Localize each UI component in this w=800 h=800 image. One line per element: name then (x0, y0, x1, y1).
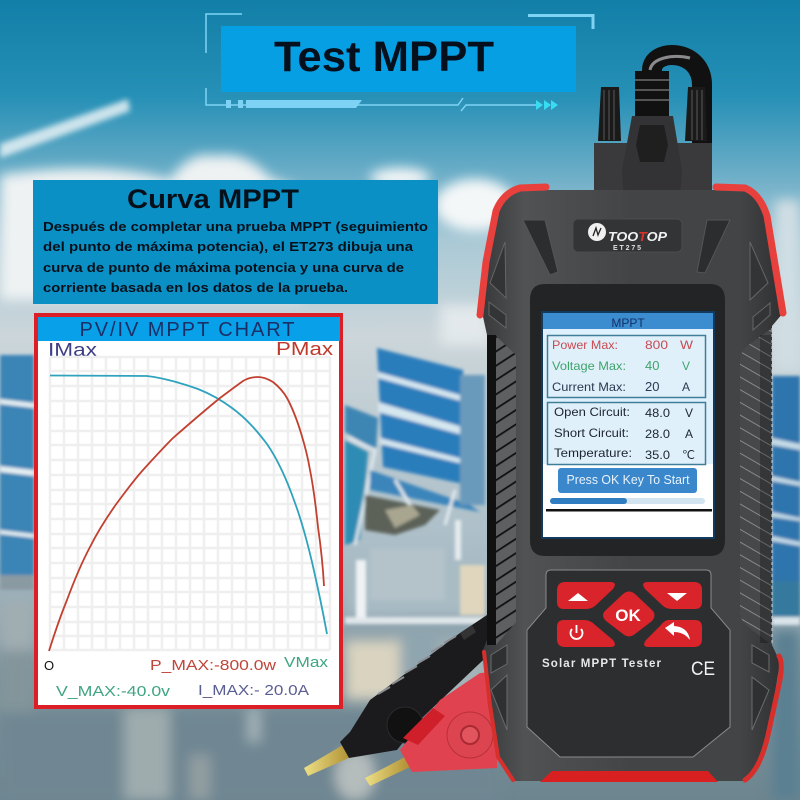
device: brand logo: ET275 (613, 245, 641, 252)
device: screen: 48.0 (645, 406, 670, 420)
title banner: Test MPPT (274, 33, 494, 81)
chart labels (44, 654, 329, 700)
device: screen: Current Max: (552, 380, 626, 394)
device: screen: W (680, 338, 694, 352)
chart labels: P_MAX:-800.0w (150, 657, 276, 674)
panel: Curva MPPT description: curva de punto de máxima potencia y una curva de (43, 260, 404, 275)
button: up (557, 582, 615, 609)
panel: Curva MPPT description: corriente basada en los datos de la prueba. (43, 280, 348, 295)
device: screen: 40 (645, 358, 659, 373)
panel: PV/IV MPPT chart (36, 315, 341, 707)
device: screen: V (682, 359, 690, 373)
device: screen: 20 (645, 379, 659, 394)
device: screen: Voltage Max: (552, 359, 626, 373)
device: side grips (487, 328, 772, 645)
device: screen: Temperature: (554, 446, 632, 460)
device: screen: A (685, 427, 693, 441)
device: screen: Press OK Key To Start (566, 472, 690, 487)
device: screen: 28.0 (645, 427, 670, 441)
test clips: black and red (304, 615, 497, 786)
panel: PV/IV MPPT chart: PMax (276, 339, 333, 359)
panel: PV/IV MPPT chart: IMax (48, 340, 97, 360)
device: screen: 35.0 (645, 448, 670, 462)
title banner frame lines (206, 14, 593, 111)
device: red edges (480, 187, 783, 780)
device: screen: V (685, 406, 693, 420)
CE mark: CE (691, 659, 715, 680)
chart: current curve (50, 376, 327, 634)
device: screen (541, 311, 715, 539)
button: power (557, 620, 615, 647)
button: back (644, 620, 702, 647)
device: lower side details (491, 645, 507, 730)
device: screen: 800 (645, 338, 668, 352)
wing streak (0, 99, 130, 158)
button: down (643, 582, 702, 609)
chart labels: VMax (284, 654, 329, 671)
device: screen: MPPT (611, 316, 645, 330)
device: screen bezel (530, 284, 725, 556)
panel: Curva MPPT description: del punto de máxima potencia), el ET273 dibuja una (43, 239, 414, 254)
panel: Curva MPPT description: Después de completar una prueba MPPT (seguimiento (43, 219, 428, 234)
device: screen: Power Max: (552, 338, 618, 352)
button: OK (603, 592, 654, 636)
device: screen: Open Circuit: (554, 405, 630, 419)
chart labels: V_MAX:-40.0v (56, 683, 171, 700)
device: tester body (480, 187, 783, 782)
device: brand logo: TOOTOP (608, 229, 667, 244)
device: screen: ℃ (682, 448, 695, 462)
chart labels: O (44, 658, 54, 673)
icon: serial connector with cable (594, 55, 712, 203)
device: bottom red strip (540, 771, 718, 782)
chart: power curve (49, 377, 324, 651)
panel: Curva MPPT description (33, 180, 438, 304)
device: screen: A (682, 380, 690, 394)
device: screen: Short Circuit: (554, 426, 629, 440)
device: keypad panel (527, 570, 730, 757)
panel: Curva MPPT description: Curva MPPT (127, 184, 300, 214)
chart labels: I_MAX:- 20.0A (198, 682, 309, 699)
panel: PV/IV MPPT chart: PV/IV MPPT CHART (80, 319, 294, 341)
product label: Solar MPPT Tester (542, 658, 662, 670)
title banner (221, 26, 576, 92)
device: brand logo (573, 219, 682, 252)
button: OK: OK (615, 606, 641, 625)
